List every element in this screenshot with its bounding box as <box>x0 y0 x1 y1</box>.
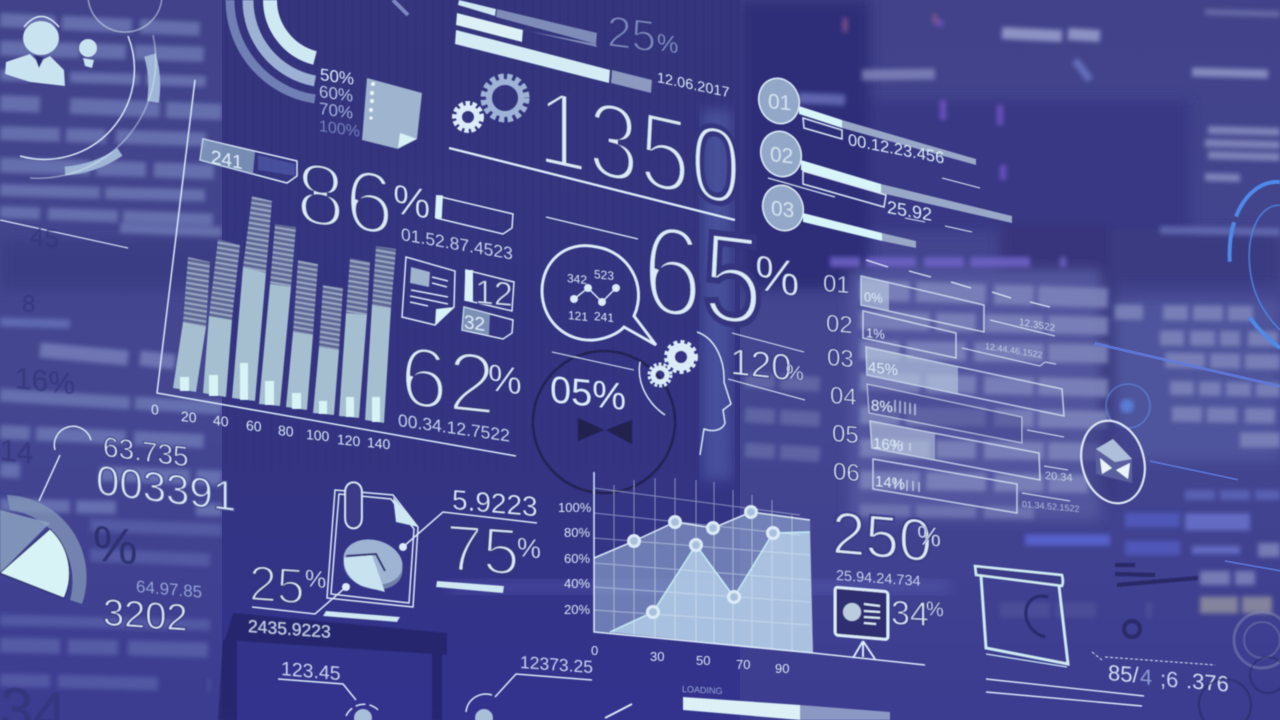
stat: 65%: 65 <box>642 197 763 355</box>
icon: large empty board <box>975 566 1144 706</box>
label: 85/46.376: ;6 <box>1160 666 1178 693</box>
list: 01 02 03 bars: 03 <box>771 197 794 222</box>
darker building masses <box>0 0 1280 520</box>
stat: 86%: 86 <box>296 142 394 255</box>
bottom-left dark board <box>218 613 447 720</box>
icon: speech bubble with network <box>542 246 656 345</box>
list: six bordered rows: 8% <box>871 397 893 416</box>
left stats: 64.97.85 and 3202: 3202 <box>103 592 188 640</box>
gears icon <box>456 78 525 129</box>
chart: area chart: 50 <box>696 653 710 668</box>
box: 32: 32 <box>464 312 485 336</box>
stat: 62%: 00.34.12.7522 <box>398 410 510 446</box>
chart: concentric gauge with percent list: 70% <box>319 99 353 123</box>
stat: 86% <box>296 142 513 264</box>
icon: right edge rings <box>1230 182 1280 348</box>
icon: presentation board <box>835 587 888 659</box>
icon: people with ring <box>5 0 162 178</box>
stat: 34%: 34 <box>891 594 929 634</box>
chart: bar chart with axes: 0 <box>151 401 159 418</box>
icon: speech bubble with network: 342 <box>567 271 587 287</box>
icon: pie on clipped document <box>252 482 537 622</box>
stat: 62%: % <box>488 356 522 404</box>
list: six bordered rows: 12.3522 <box>1019 317 1055 334</box>
left stats: 64.97.85 and 3202: % <box>93 515 137 576</box>
chart: bar chart with axes: 80 <box>278 422 294 440</box>
label: 123.45 with dial: 123.45 <box>281 658 341 685</box>
list: six bordered rows: 0% <box>864 289 883 306</box>
tag: 241 <box>200 139 297 183</box>
stat: 250%: 25.94.24.734 <box>836 568 921 590</box>
label: 123.45 with dial <box>278 658 380 720</box>
icon: envelope in circle <box>1072 384 1154 511</box>
top progress bars <box>455 0 652 93</box>
label: 12373.25 with dial: 12373.25 <box>520 652 593 677</box>
chart: pie at left <box>0 495 87 604</box>
left stats: 63.735 and 003391: 63.735 <box>103 431 189 472</box>
stat: 120%: 120 <box>730 340 792 388</box>
list: six bordered rows: 01.34.52.1522 <box>1022 499 1079 514</box>
stat: 25% top: % <box>657 29 678 59</box>
stat: 62% <box>398 328 522 446</box>
stat: 86%: % <box>393 175 430 228</box>
top-right window streaks <box>798 12 1280 232</box>
left window rows <box>0 20 222 685</box>
list: 01 02 03 bars: 02 <box>770 143 793 168</box>
list: 01 02 03 bars: 25.92 <box>887 197 932 225</box>
label: 85/46.376: .376 <box>1186 668 1229 697</box>
chart: area chart: 90 <box>775 661 789 676</box>
faded left line and numbers: 45 <box>30 221 59 254</box>
stat: 25% top <box>607 7 678 62</box>
chart: area chart: 20% <box>564 602 590 617</box>
date label: 12.06.2017 <box>657 70 730 101</box>
chart: area chart: 80% <box>564 525 590 540</box>
label: 85/46.376: 85/ <box>1108 660 1139 688</box>
list: six bordered rows <box>823 260 1079 514</box>
stat: 120%: % <box>786 361 804 385</box>
faded left line and numbers: 16% <box>15 362 75 401</box>
bottom progress bar <box>682 684 890 720</box>
label: 85/46.376: 4 <box>1140 664 1152 690</box>
list: 01 02 03 bars: 00.12.23.456 <box>848 130 944 168</box>
stat: 25% bottom: 25 <box>249 555 305 615</box>
label: 85/46.376 <box>1092 652 1229 697</box>
list: 01 02 03 bars <box>752 73 1012 248</box>
stat: 250%: 250 <box>832 499 932 575</box>
stat: 75%: % <box>517 531 541 565</box>
chart: area chart: 100% <box>558 500 592 515</box>
bottom progress bar: LOADING <box>682 684 722 696</box>
icon: speech bubble with network: 241 <box>594 309 614 325</box>
list: six bordered rows: 1% <box>866 325 885 342</box>
stat: 75% <box>436 511 541 593</box>
chart: concentric gauge with percent list: 50% <box>320 65 354 89</box>
stat: 75%: 75 <box>446 511 519 590</box>
icon: profile document <box>402 257 455 325</box>
list: six bordered rows: 12.44.46.1522 <box>985 341 1042 360</box>
chart: bar chart with axes <box>151 80 516 456</box>
list: six bordered rows: 03 <box>827 344 854 373</box>
chart: area chart: 70 <box>736 657 750 672</box>
list: six bordered rows: 45% <box>868 359 898 379</box>
chart: area chart: 0 <box>591 643 598 658</box>
box: 12: 12 <box>475 273 513 314</box>
stat: 5.9223: 5.9223 <box>452 484 538 522</box>
stat: 65%: % <box>755 243 799 308</box>
stat: 86%: 01.52.87.4523 <box>401 224 513 264</box>
stat: 65% <box>546 197 799 355</box>
chart: area chart: 60% <box>564 551 590 566</box>
chart: concentric gauge with percent list: 60% <box>319 82 353 106</box>
list: six bordered rows: 20.34 <box>1045 470 1073 484</box>
chart: area chart <box>558 472 925 676</box>
central panel <box>222 0 740 720</box>
left stats: 63.735 and 003391 <box>39 426 236 520</box>
stat: 120% <box>728 333 805 400</box>
label: 12373.25 with dial <box>466 652 632 720</box>
tag: 241: 241 <box>211 147 243 174</box>
dark accents right-bottom <box>1115 565 1280 720</box>
list: 01 02 03 bars: 01 <box>768 90 791 115</box>
stat: 1350: 1350 <box>537 65 741 231</box>
stat: 62%: 62 <box>400 328 496 434</box>
faded left line and numbers: 8 <box>22 291 35 318</box>
list: six bordered rows: 04 <box>830 382 857 411</box>
chart: bar chart with axes: 20 <box>181 408 197 426</box>
faded left line and numbers: 14 <box>0 434 33 470</box>
chart: bar chart with axes: 140 <box>367 434 391 452</box>
chart: bar chart with axes: 40 <box>213 412 229 430</box>
chart: concentric gauge with percent list: 100% <box>319 117 360 141</box>
chart: concentric gauge with percent list <box>230 0 408 141</box>
left stats: 63.735 and 003391: 003391 <box>96 456 236 520</box>
list: six bordered rows: 14% <box>875 473 905 493</box>
circle stat: 05% <box>533 351 675 493</box>
faded left line and numbers <box>0 220 128 720</box>
chart: bar chart with axes: 100 <box>306 426 330 444</box>
list: six bordered rows: 02 <box>826 310 853 339</box>
left stats: 64.97.85 and 3202: 64.97.85 <box>136 577 202 602</box>
icon: folded document <box>362 78 422 149</box>
list: six bordered rows: 01 <box>823 270 850 299</box>
stat: 1350 <box>449 65 741 231</box>
stat: 25% bottom <box>248 555 331 642</box>
chart: bar chart with axes: 60 <box>246 417 262 435</box>
list: six bordered rows: 16% <box>873 435 903 455</box>
circle stat: 05%: 05% <box>550 369 626 419</box>
stat: 25% top: 25 <box>607 7 656 62</box>
chart: bar chart with axes: 120 <box>337 431 361 449</box>
chart: area chart: 40% <box>564 576 590 591</box>
right-middle window rows <box>745 262 1280 610</box>
icon: speech bubble with network: 121 <box>568 308 588 324</box>
stat: 250%: % <box>917 519 941 553</box>
icon: speech bubble with network: 523 <box>594 267 614 283</box>
list: six bordered rows: 06 <box>833 458 860 487</box>
stat: 25% bottom: 2435.9223 <box>248 616 331 642</box>
list: six bordered rows: 05 <box>832 420 859 449</box>
stat: 25% bottom: % <box>305 565 326 594</box>
stat: 34%: % <box>926 598 944 622</box>
chart: area chart: 30 <box>650 649 664 664</box>
left stats: 64.97.85 and 3202 <box>93 515 202 640</box>
icon: head with gears <box>639 332 731 455</box>
box: 32 <box>462 307 513 339</box>
